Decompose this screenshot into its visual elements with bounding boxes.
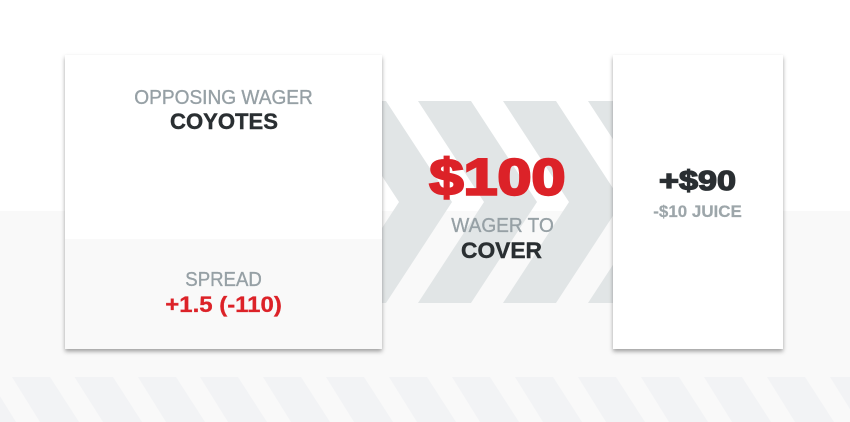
label: spread: SPREAD [185,269,262,291]
payout amount: +$90 [659,165,736,196]
panel: payout card [613,55,783,349]
chevron arrows band [382,101,613,303]
label: opposing wager: OPPOSING WAGER [134,87,313,109]
bottom diagonal stripes [0,377,850,422]
panel: opposing wager card [65,55,382,349]
label: cover: COVER [461,238,542,263]
label: wager to: WAGER TO [451,215,554,237]
spread value: +1.5 (-110) [165,292,282,317]
team: coyotes: COYOTES [170,109,278,134]
juice label: -$10 JUICE [653,203,742,221]
wager amount: $100 [430,148,566,206]
